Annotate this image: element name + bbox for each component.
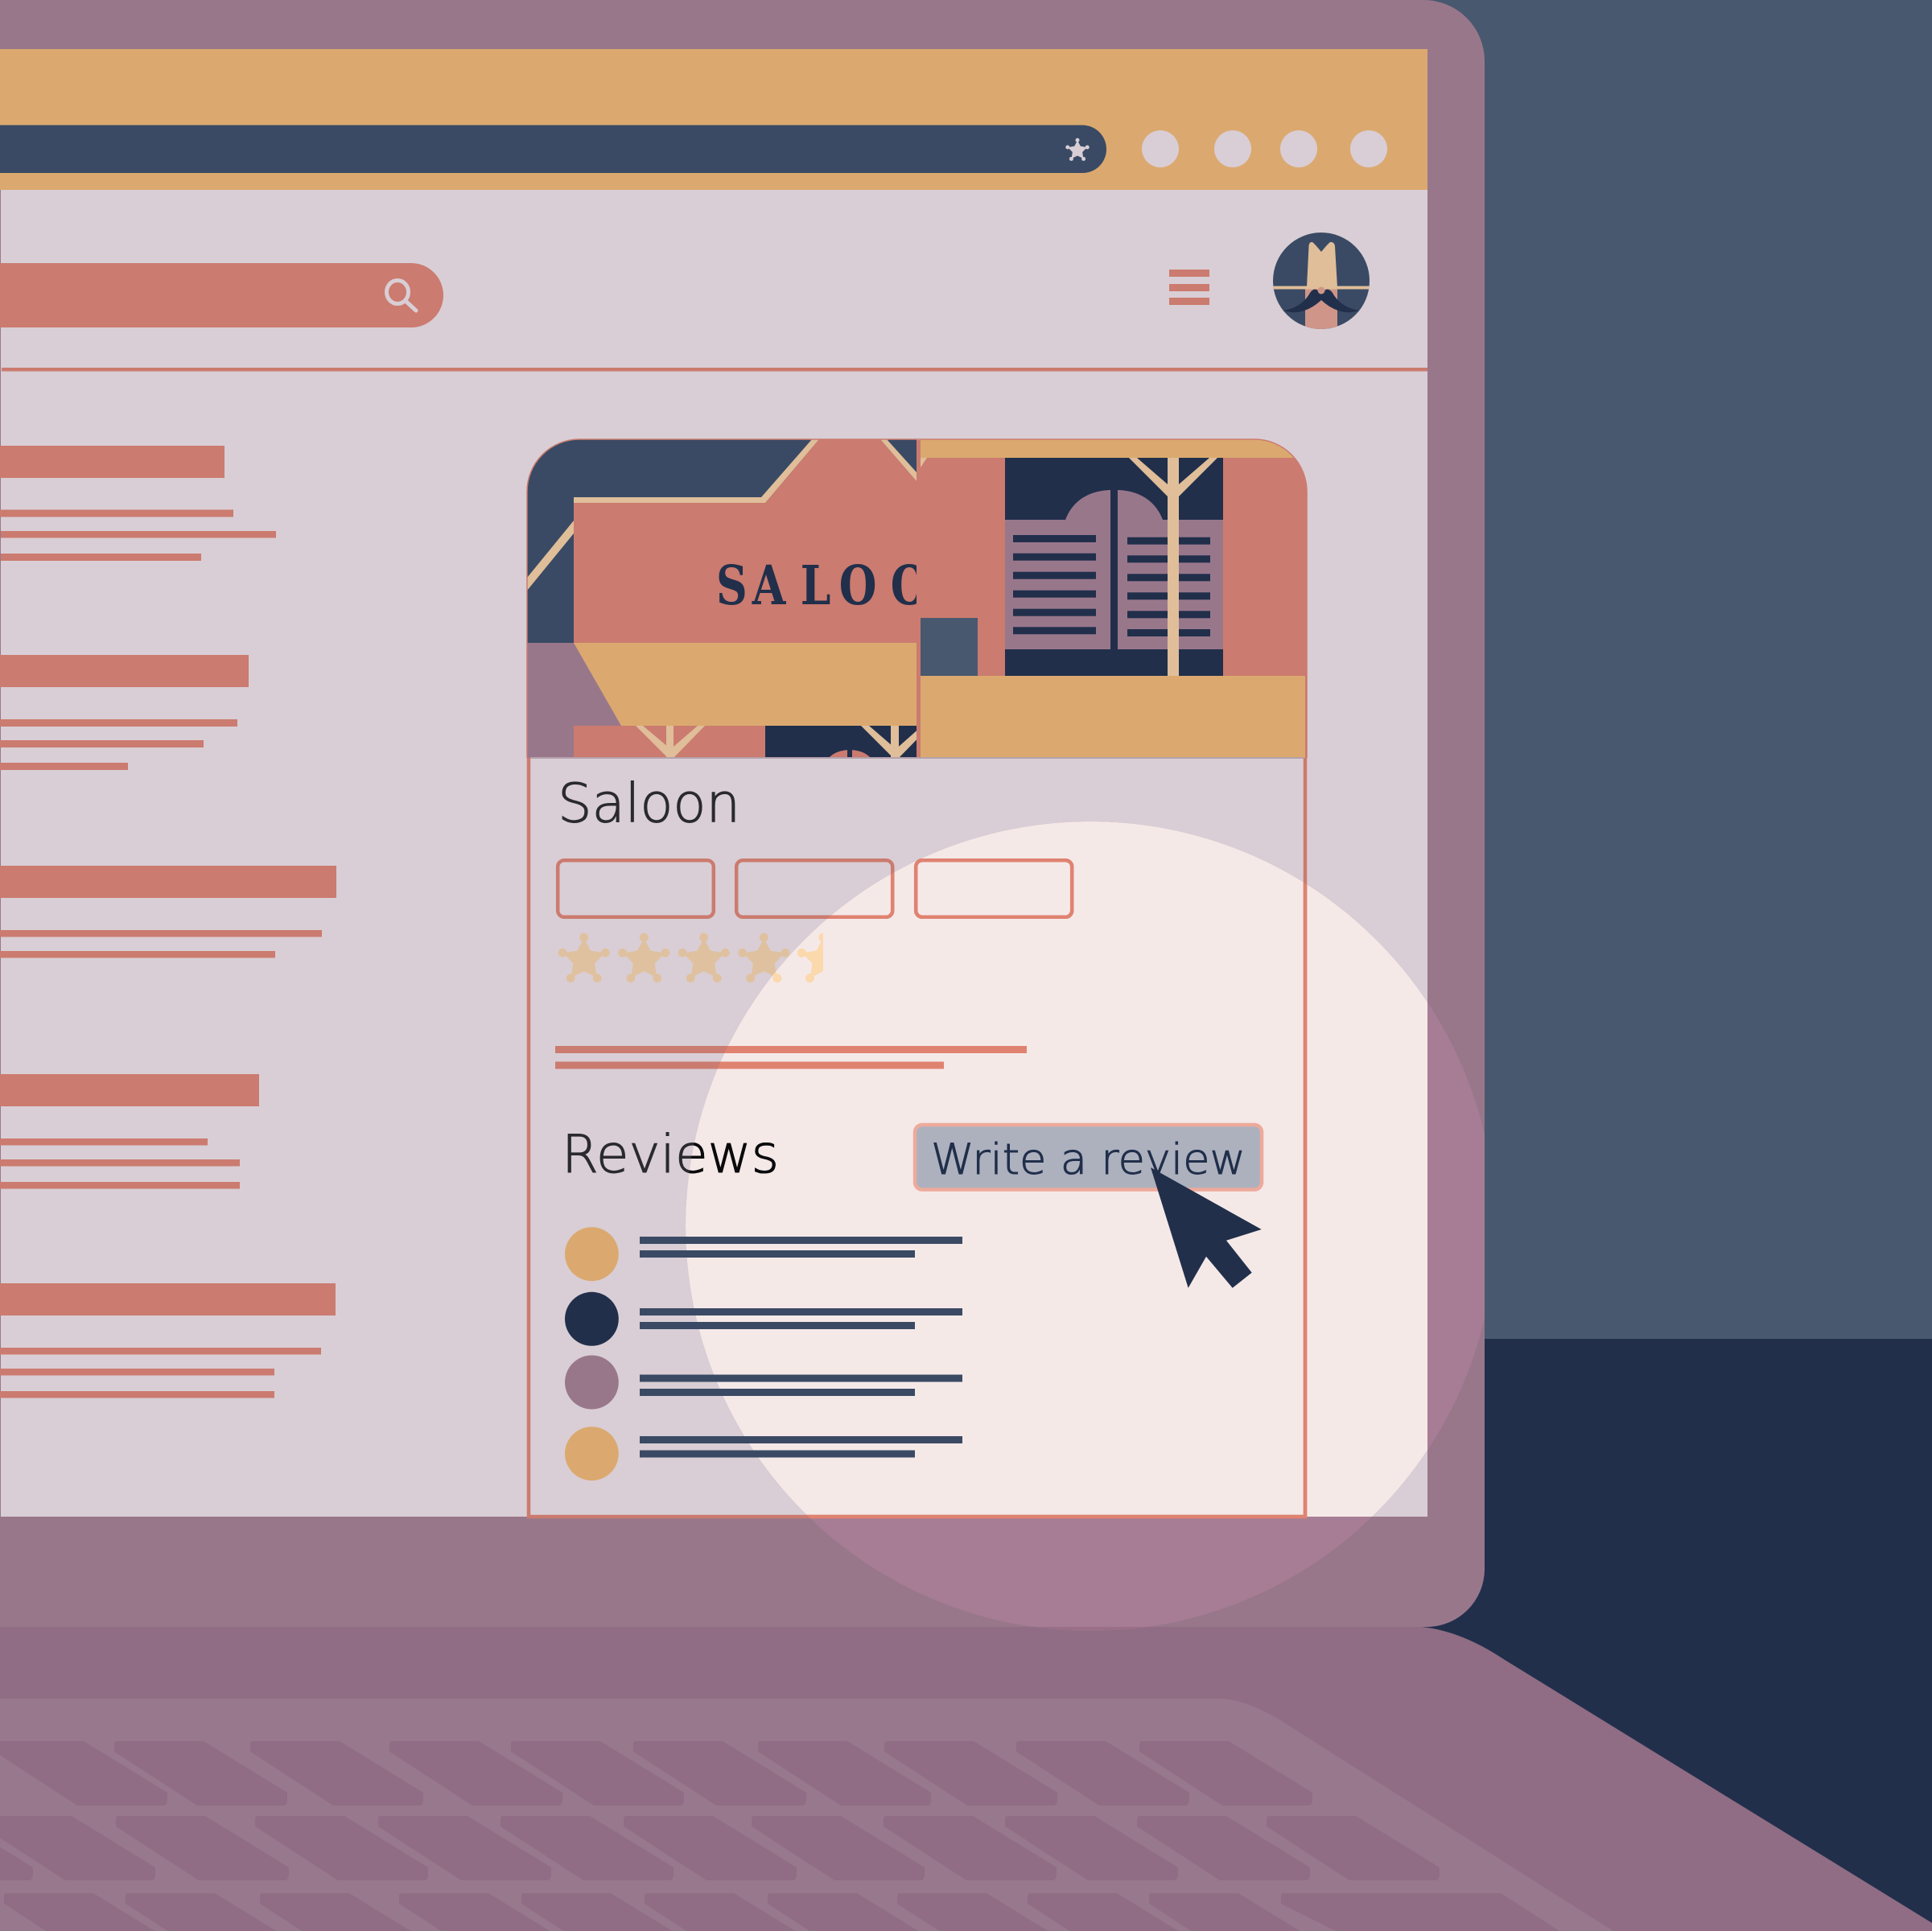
review 4 xyxy=(565,1427,962,1480)
tag boxes xyxy=(558,860,1072,917)
screen xyxy=(1,190,1427,1517)
review 2 xyxy=(565,1292,962,1346)
search bar xyxy=(0,263,443,327)
left sidebar list xyxy=(0,446,336,1398)
icon: sheriff star bookmark xyxy=(1065,138,1090,161)
keyboard keys xyxy=(0,1741,1559,1931)
button: write a review: Write a review xyxy=(931,1135,1246,1184)
background wall xyxy=(0,0,1932,1339)
icon: mouse cursor xyxy=(1151,1167,1262,1288)
button: write a review xyxy=(915,1125,1262,1189)
post and bracket xyxy=(1129,458,1217,676)
window buttons xyxy=(1142,130,1387,167)
heading: Saloon: Saloon xyxy=(558,772,740,835)
sign text: SALOON xyxy=(716,554,982,618)
hamburger menu xyxy=(1169,270,1209,305)
spotlight brightened details: Reviews xyxy=(562,1125,779,1185)
swinging doors xyxy=(1005,458,1223,676)
site header xyxy=(0,233,1370,336)
star rating xyxy=(558,933,849,982)
image divider xyxy=(917,440,921,758)
address bar xyxy=(0,126,1106,173)
laptop base xyxy=(0,1627,1932,1931)
card image: left panel xyxy=(528,439,917,758)
review 3 xyxy=(565,1355,962,1410)
avatar: cowboy xyxy=(1273,233,1370,336)
header divider xyxy=(2,368,1427,372)
background desk xyxy=(0,1339,1932,1931)
browser toolbar xyxy=(0,49,1427,190)
review list xyxy=(565,1227,962,1480)
heading: Reviews: Reviews xyxy=(562,1125,779,1185)
review 1 xyxy=(565,1227,962,1281)
description lines xyxy=(555,1046,1027,1068)
image bottom edge xyxy=(530,757,1304,759)
window xyxy=(921,618,978,676)
saloon card xyxy=(527,439,1307,1517)
card image: right panel xyxy=(921,439,1307,758)
laptop lid xyxy=(0,0,1485,1627)
icon: magnifier xyxy=(386,280,416,311)
spotlight brightened details xyxy=(689,858,1307,1519)
spotlight xyxy=(686,821,1485,1631)
boardwalk xyxy=(921,676,1305,758)
keyboard deck xyxy=(0,1698,1613,1931)
card outline xyxy=(527,439,1307,758)
